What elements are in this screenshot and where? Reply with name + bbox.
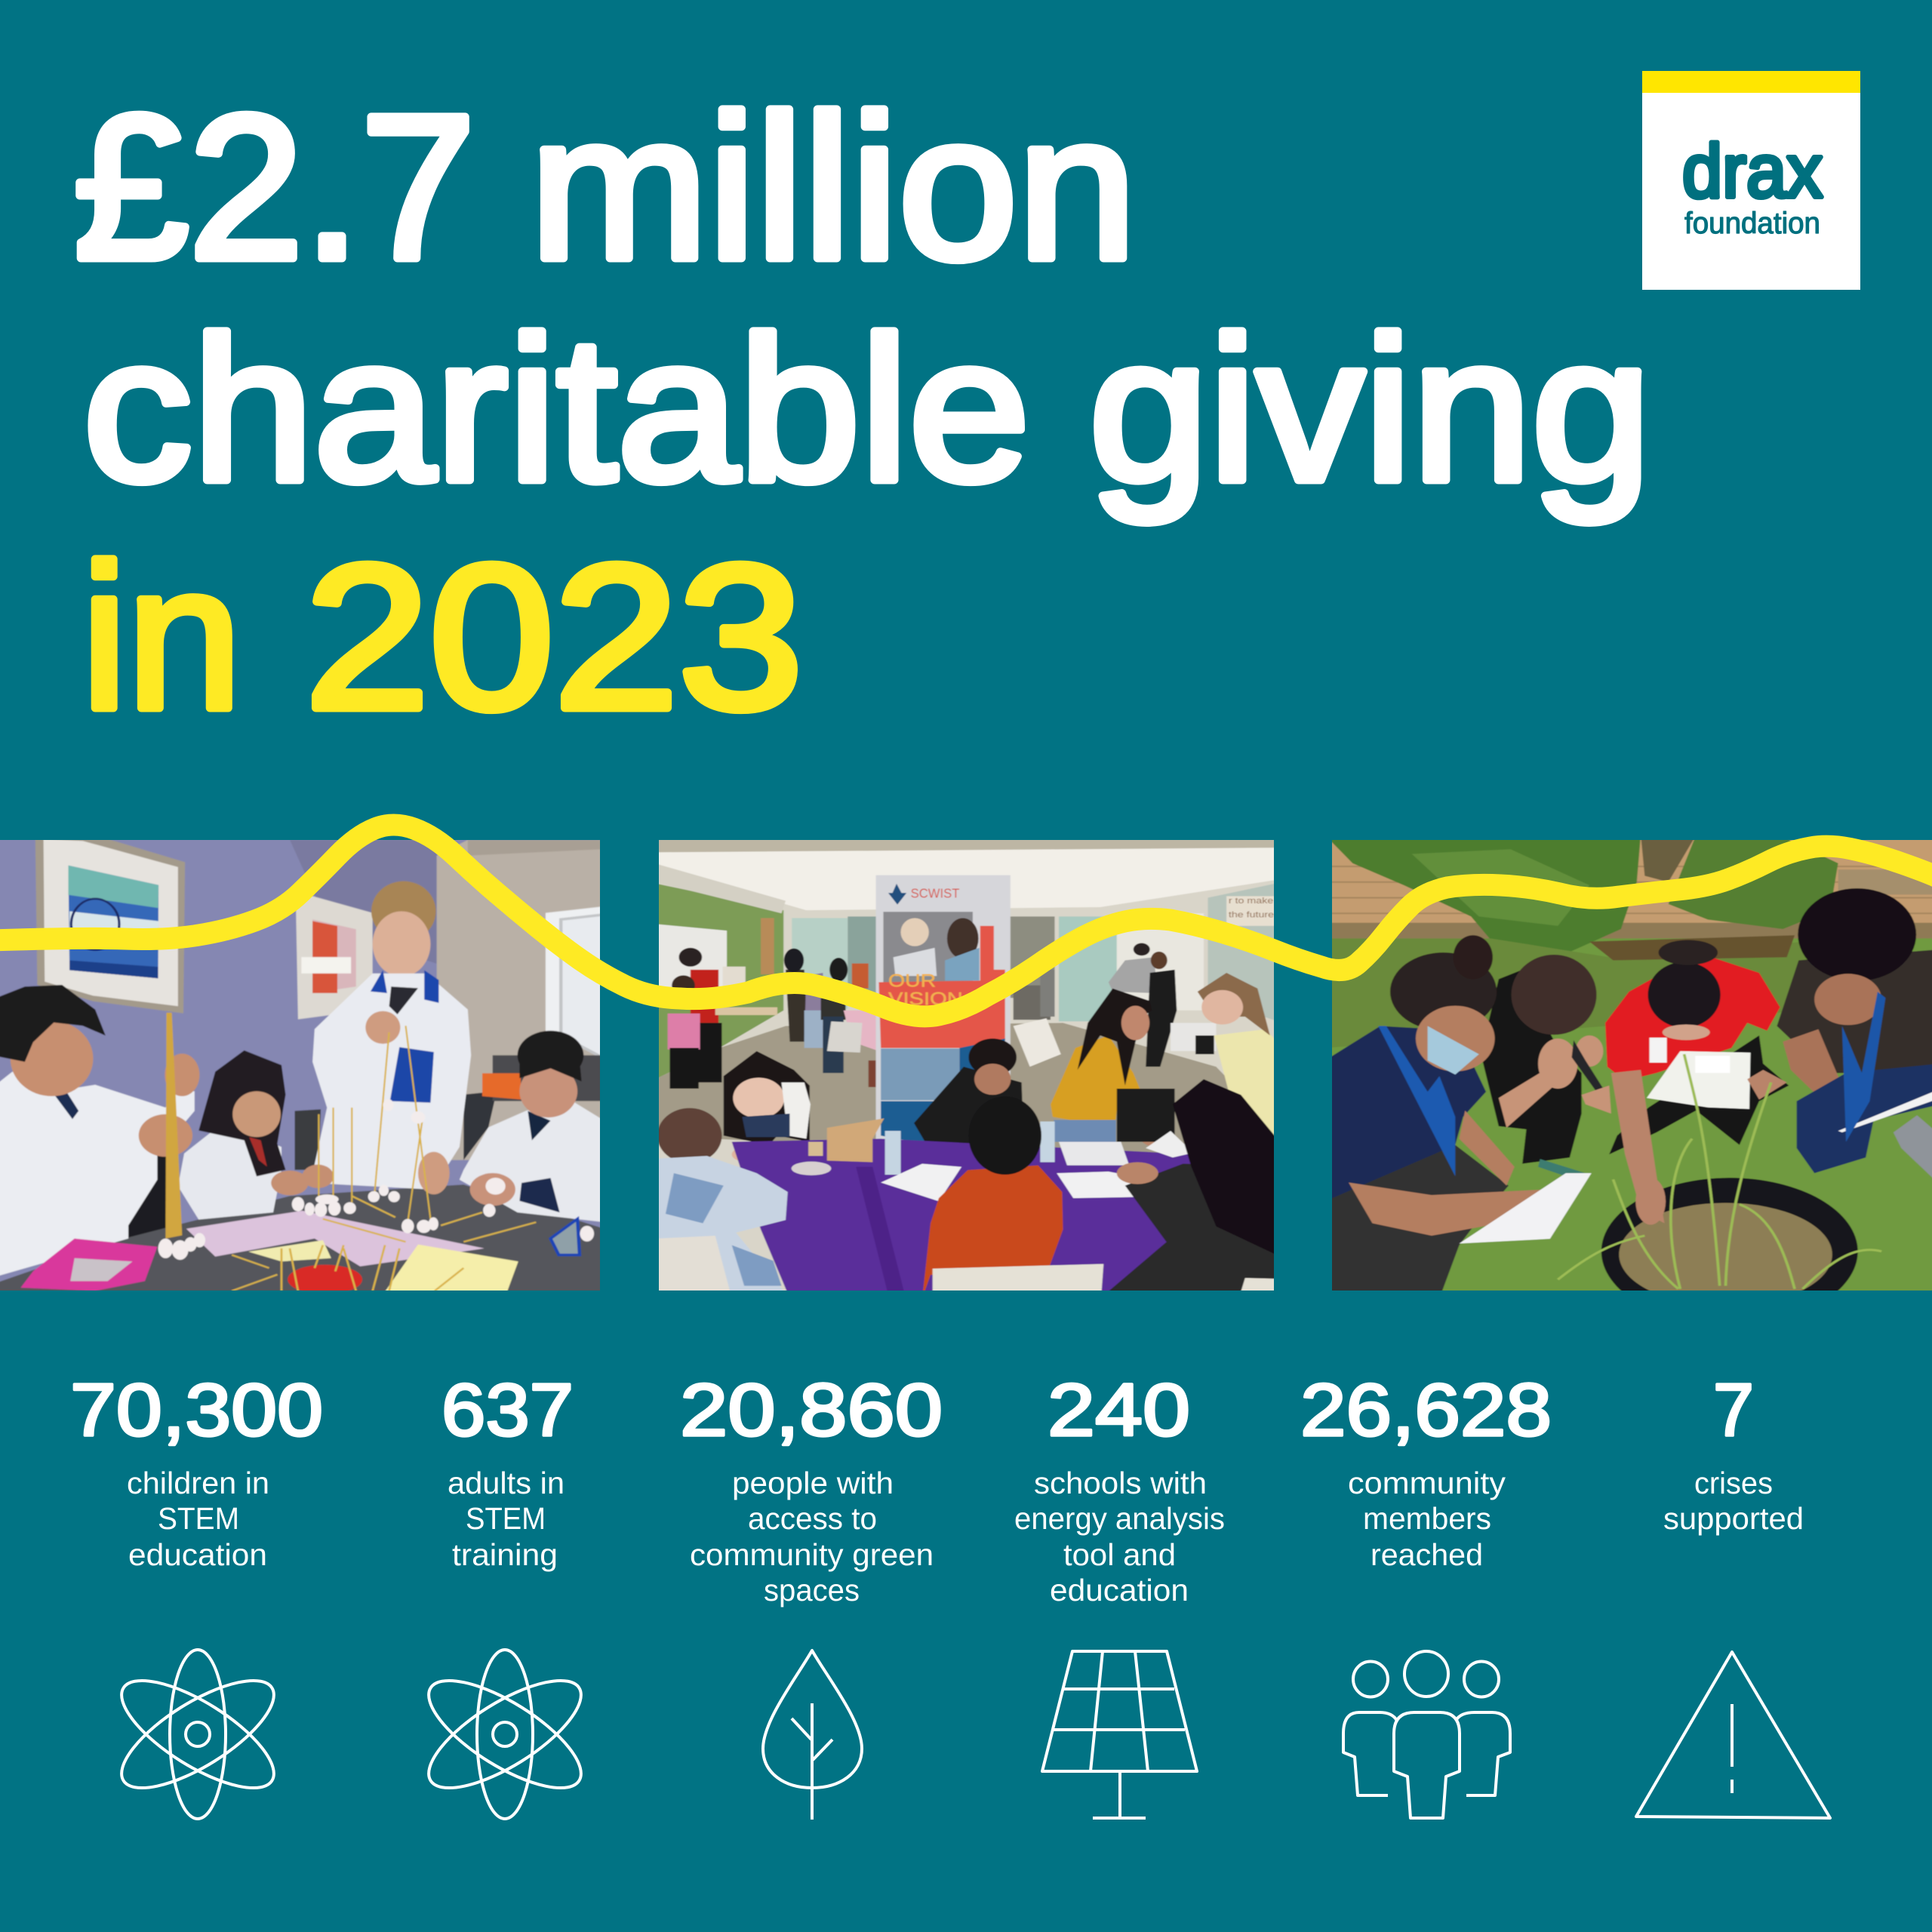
stat: 20,860 people: people with (732, 1466, 894, 1500)
stat: 240 schools: schools with (1034, 1466, 1207, 1500)
title line 1 (74, 72, 1137, 302)
stat: 240 schools (1014, 1368, 1225, 1607)
chairs (295, 1109, 321, 1170)
stat: 70,300 children (70, 1368, 323, 1572)
person 4 dark tee (1777, 949, 1932, 1073)
icon: solar panel (1042, 1651, 1197, 1818)
stat: 240 schools: 240 (1048, 1368, 1190, 1451)
title line 3 (82, 522, 803, 752)
SCWIST banner: SCWIST (911, 887, 959, 901)
stat: 20,860 people: spaces (764, 1573, 860, 1607)
photo: SCWIST outreach table with purple tablecloth: r to make (1229, 897, 1273, 906)
stat: 637 adults: training (452, 1537, 558, 1572)
SCWIST banner: OUR (888, 971, 936, 991)
person 2 (1481, 967, 1582, 1164)
pink bag (20, 1238, 157, 1291)
frame 2 (296, 896, 373, 1020)
icon: atom (children) (106, 1650, 289, 1819)
icon: atom (adults) (414, 1650, 596, 1819)
stat: 637 adults (441, 1368, 574, 1572)
table (0, 1185, 605, 1297)
stat: 70,300 children: STEM (158, 1501, 239, 1536)
stat: 637 adults: 637 (441, 1368, 574, 1451)
marshmallows (158, 1099, 594, 1260)
orange jacket child (922, 1165, 1063, 1298)
photo: students studying plants outdoors (1325, 835, 1932, 1325)
stat: 7 crises: 7 (1713, 1368, 1754, 1451)
floor (659, 1023, 1229, 1153)
red lid (288, 1265, 362, 1294)
SCWIST banner (876, 875, 1011, 1142)
stat: 240 schools: energy analysis (1014, 1501, 1225, 1536)
stat: 7 crises: crises (1694, 1466, 1773, 1500)
stat: 240 schools: tool and (1063, 1537, 1176, 1572)
stat: 7 crises (1663, 1368, 1804, 1536)
title line 2 (83, 294, 1651, 525)
stat: 637 adults: STEM (466, 1501, 546, 1536)
stat: 26,628 community members: members (1363, 1501, 1491, 1536)
papers (186, 1211, 485, 1266)
title line 2: charitable (83, 294, 1030, 524)
title (74, 72, 1651, 752)
stat: 637 adults: adults in (448, 1466, 565, 1500)
stat: 26,628 community members (1300, 1368, 1552, 1572)
pond tyre (1601, 1178, 1858, 1325)
frame 1 (35, 832, 185, 1014)
title line 3: in (82, 522, 242, 752)
stat: 20,860 people: community green (690, 1537, 934, 1572)
stat: 26,628 community members: reached (1371, 1537, 1483, 1572)
stat: 20,860 people: 20,860 (680, 1368, 943, 1451)
stat: 26,628 community members: 26,628 (1300, 1368, 1552, 1451)
logo: drax foundation: foundation (1684, 207, 1820, 240)
yellow wave line across photos (0, 825, 1932, 1017)
title line 1: million (530, 72, 1137, 302)
teacher (310, 881, 471, 1195)
stat: 20,860 people (680, 1368, 943, 1607)
seated and standing people (724, 973, 1282, 1163)
icon: leaf (763, 1651, 862, 1820)
left child in blue-white jacket (657, 1108, 722, 1163)
icon: warning triangle (1636, 1652, 1830, 1818)
stat: 240 schools: education (1050, 1573, 1189, 1607)
right girl in black (1109, 1164, 1274, 1291)
purple table (732, 1139, 1195, 1298)
spaghetti (232, 1026, 536, 1291)
boy right (460, 1031, 605, 1255)
title line 1: £2.7 (74, 72, 475, 302)
logo: drax foundation: drax (1682, 129, 1823, 214)
title line 2: giving (1089, 294, 1651, 525)
table items (827, 1118, 884, 1162)
boy left (0, 985, 199, 1278)
person 1 navy (1325, 1026, 1486, 1201)
person 3 red (1609, 1035, 1789, 1155)
icon: group of people (1343, 1651, 1510, 1818)
grass blades (1558, 1054, 1881, 1289)
photo: SCWIST outreach table with purple tablecloth (649, 835, 1282, 1298)
stat: 20,860 people: access to (748, 1501, 877, 1536)
SCWIST banner: VISION (888, 988, 963, 1008)
stat: 70,300 children: children in (127, 1466, 269, 1500)
title line 3: 2023 (305, 522, 803, 752)
stat: 70,300 children: 70,300 (70, 1368, 323, 1451)
stat: 26,628 community members: community (1348, 1466, 1506, 1500)
logo: drax foundation (1642, 71, 1860, 290)
girl (178, 1051, 334, 1220)
stat: 70,300 children: education (128, 1537, 267, 1572)
background visitors (668, 943, 1216, 1088)
stat: 7 crises: supported (1663, 1501, 1804, 1536)
photo: SCWIST outreach table with purple tablecloth: the future (1229, 910, 1274, 919)
photo: children building spaghetti towers in lab coats (0, 832, 608, 1297)
bush (1325, 835, 1641, 957)
